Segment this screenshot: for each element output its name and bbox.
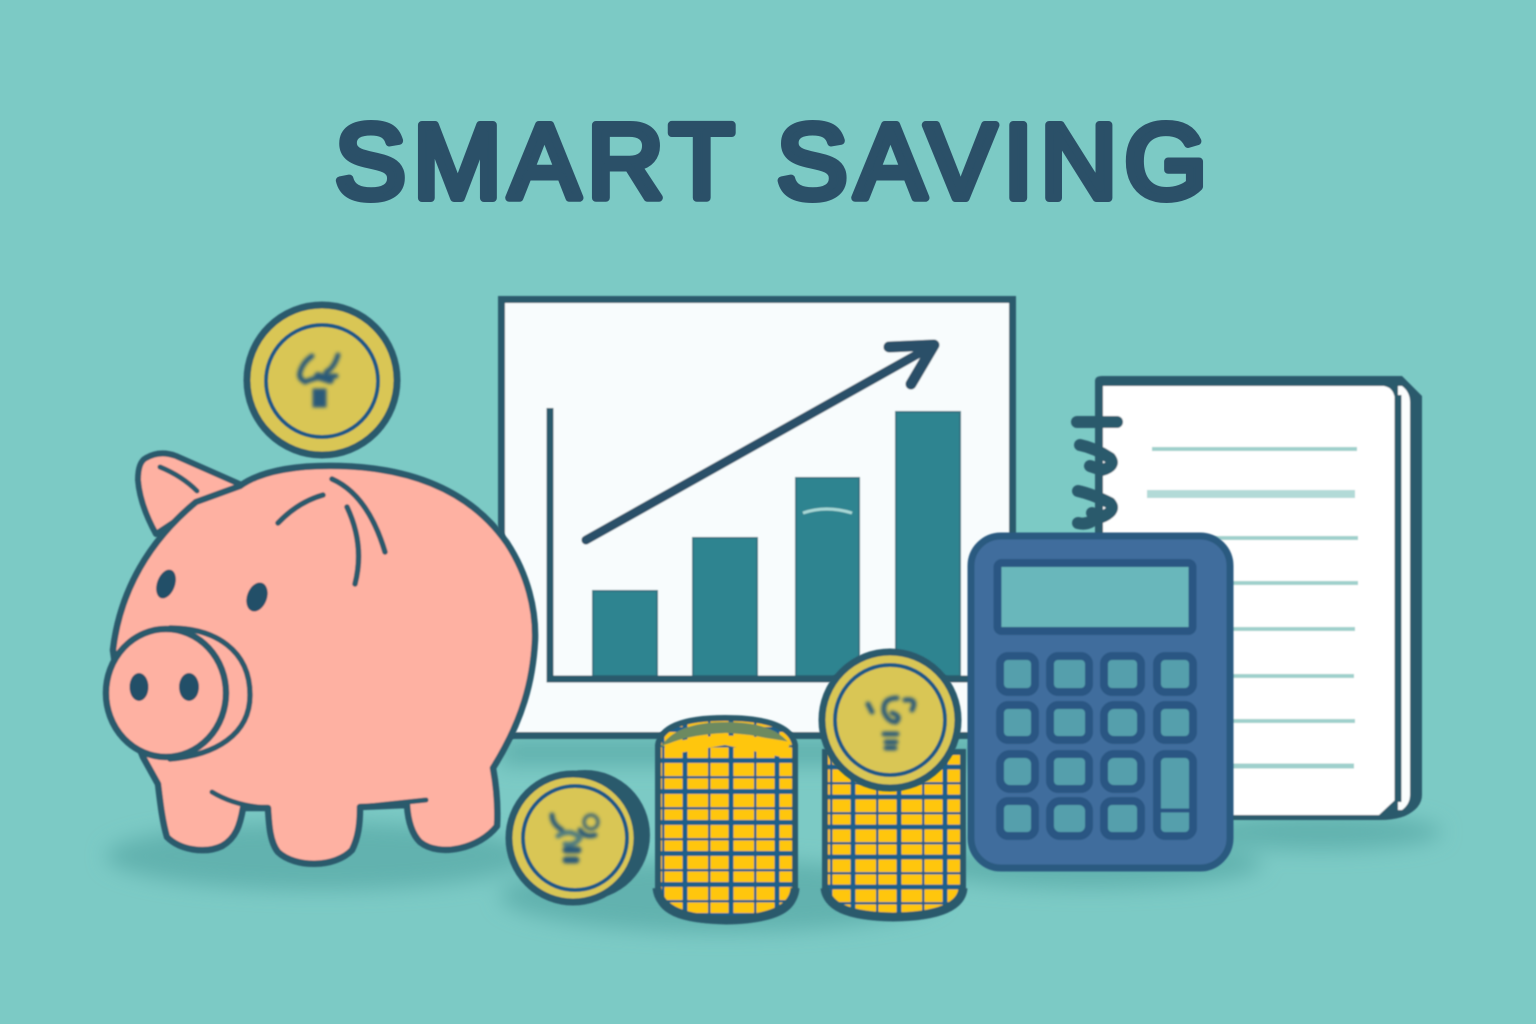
coin: on right stack (822, 652, 958, 788)
coin stack: right (825, 752, 963, 918)
ground shadows (106, 738, 1442, 932)
growth arrow (586, 345, 934, 540)
page edge (1394, 395, 1402, 802)
calculator body (971, 536, 1230, 868)
pig wrinkles (278, 479, 385, 584)
calculator keypad (1000, 656, 1193, 836)
pig snout (106, 629, 226, 757)
panel: notebook (1077, 376, 1422, 820)
stack base edge (825, 888, 963, 917)
coin: above piggy bank (247, 305, 397, 455)
coin stack: left (657, 718, 795, 921)
pig ear crease (160, 467, 197, 491)
title: SMART SAVING (335, 103, 1207, 221)
notebook ruled lines (1147, 449, 1358, 766)
chart frame (502, 300, 1012, 736)
pig snout side (170, 628, 250, 759)
pig ear (138, 453, 244, 534)
calculator screen (998, 563, 1192, 631)
pig belly line (212, 792, 426, 808)
coin icon: lightbulb (300, 355, 338, 406)
coin edge (520, 770, 650, 900)
bar highlight (803, 509, 852, 513)
pig eyes (152, 567, 272, 615)
stack base edge (657, 888, 795, 920)
coin icon: lightbulb (868, 698, 914, 748)
panel: growth chart (502, 300, 1012, 736)
notebook page (1103, 386, 1395, 815)
notebook spiral (1077, 422, 1117, 524)
notebook cover (1095, 376, 1422, 820)
panel: calculator (971, 536, 1230, 868)
pig nostrils (130, 673, 199, 701)
cover inner strip (1398, 386, 1410, 810)
piggy bank (106, 453, 535, 864)
bar chart (593, 412, 960, 676)
stack top coin (660, 722, 792, 748)
coin: leaning bottom left (509, 770, 650, 902)
coin icon: lightbulb (552, 815, 598, 860)
pig body (113, 466, 535, 864)
equals key divider (1158, 808, 1192, 812)
chart axes (550, 408, 975, 679)
